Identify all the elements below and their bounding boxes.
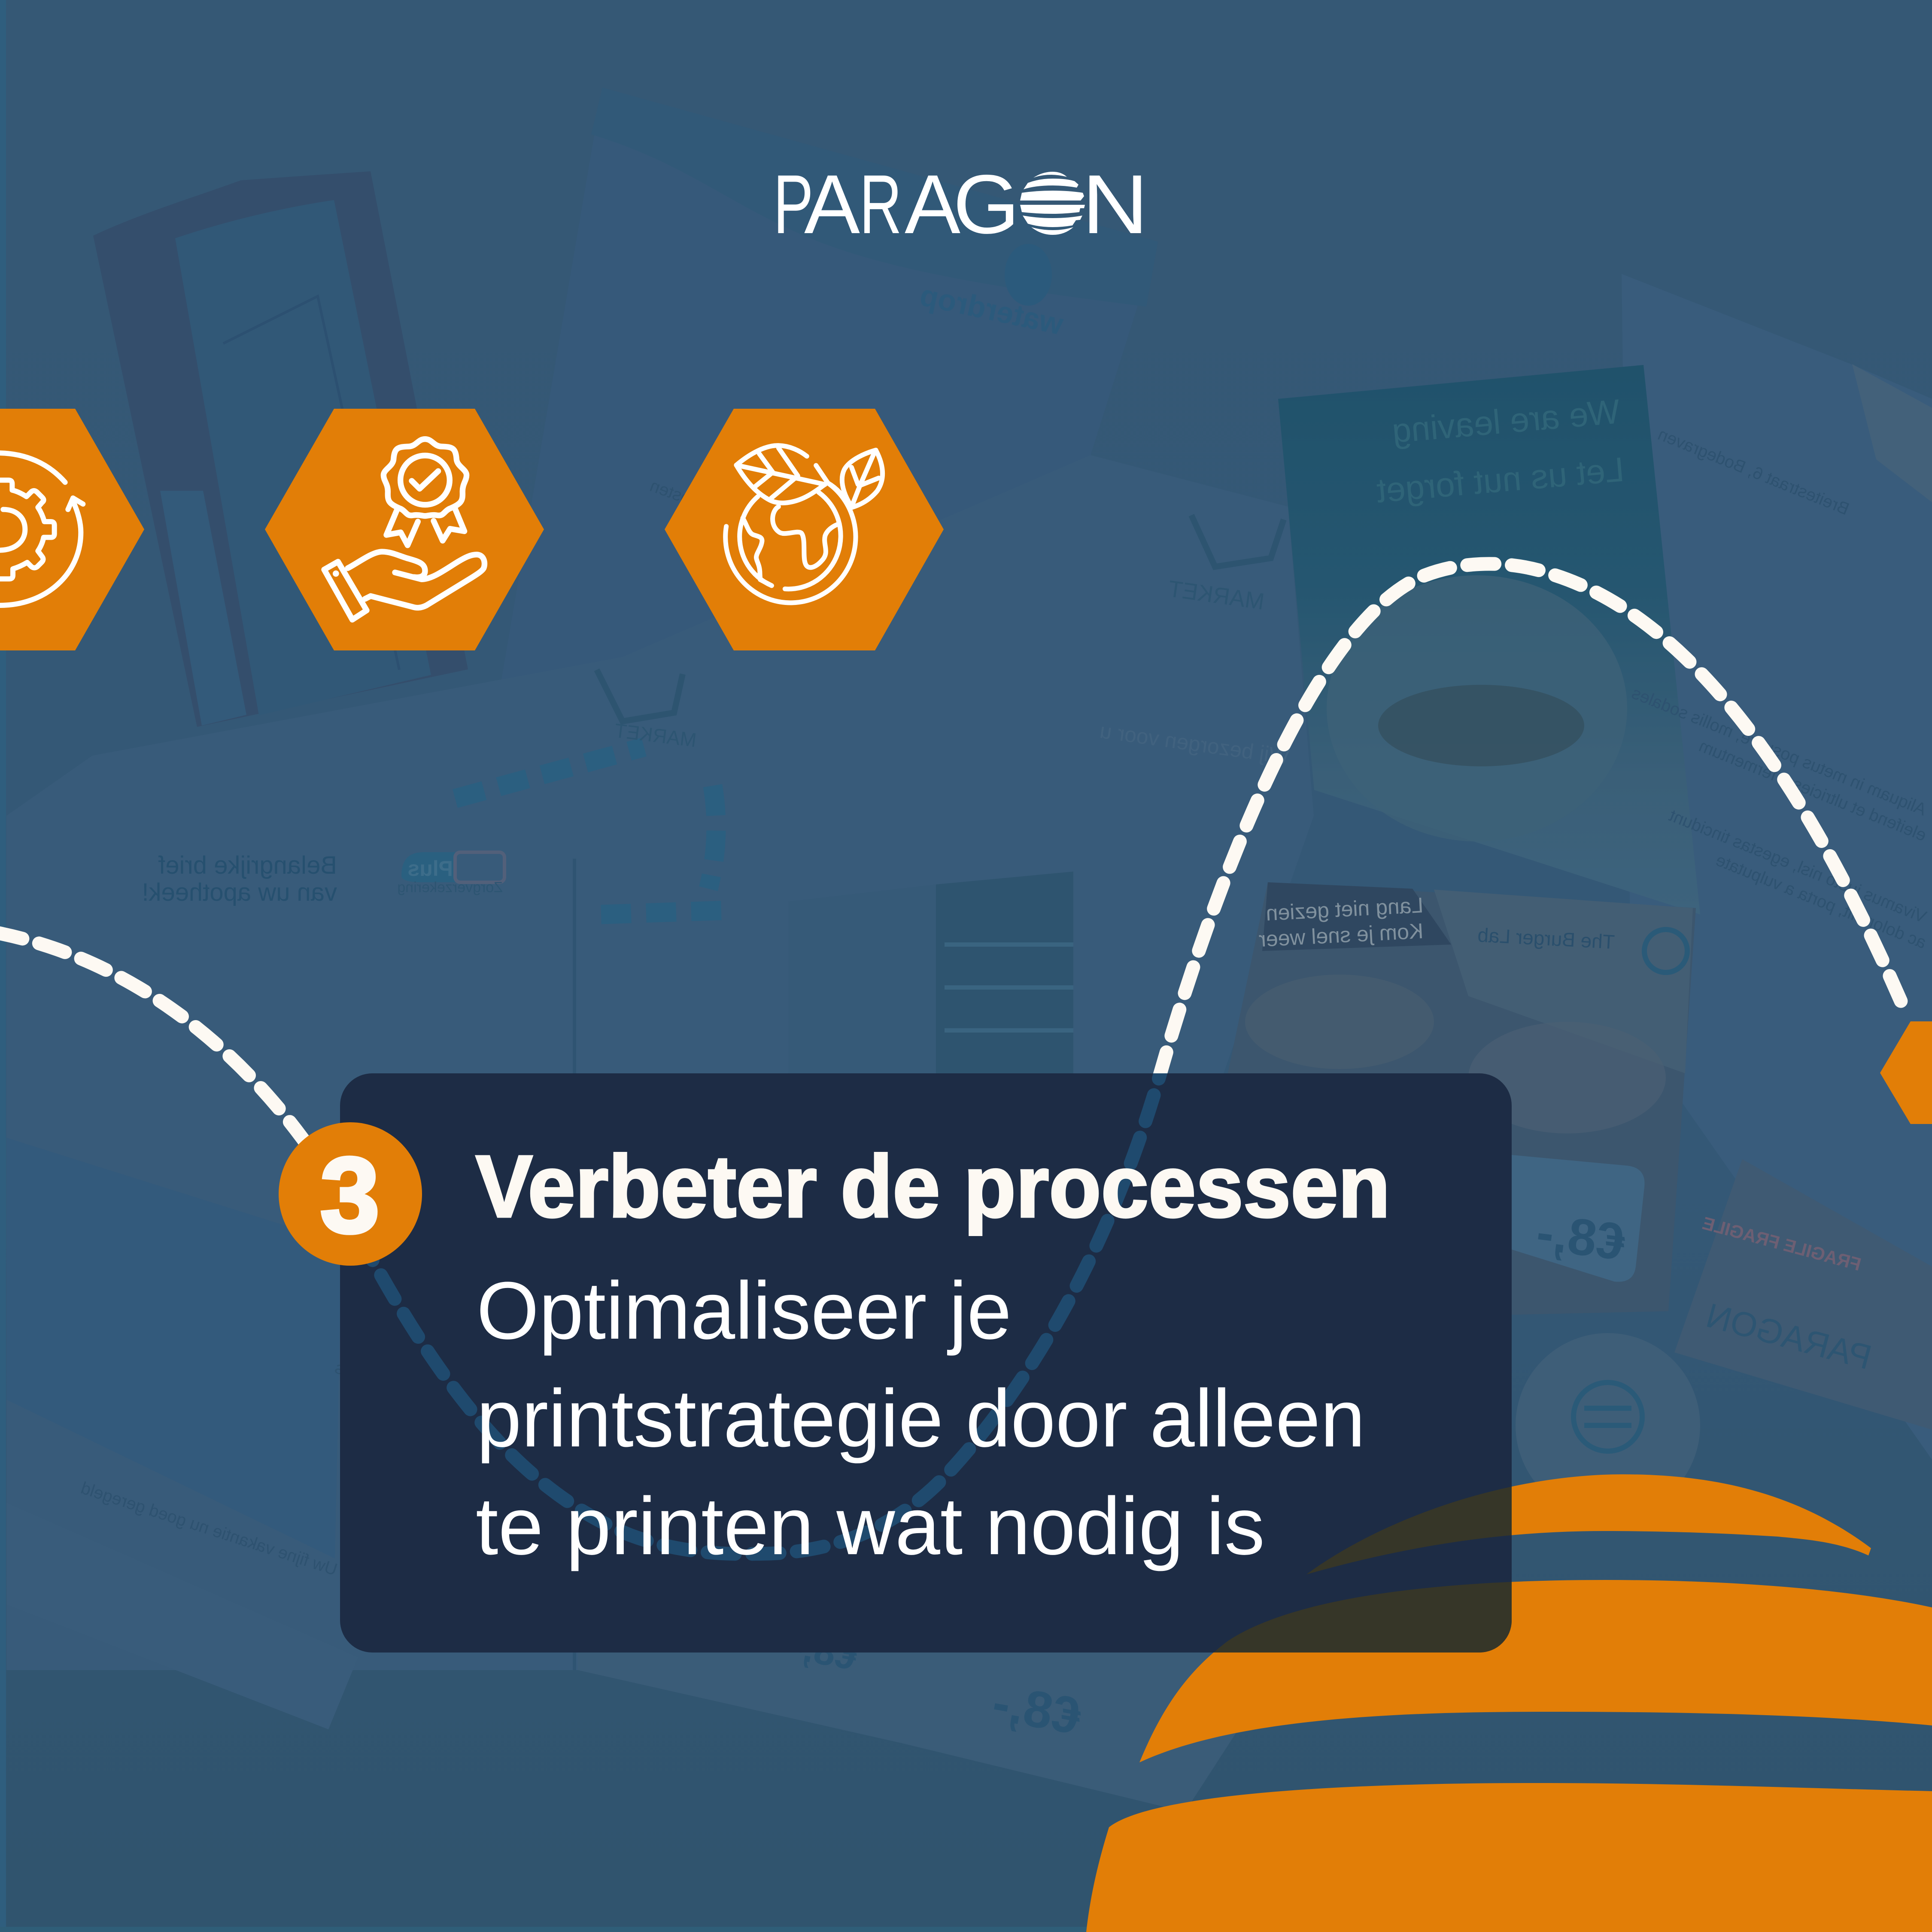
background: faded mirrored photo of printed mailings: Lang niet gezien (1265, 893, 1424, 925)
background: faded mirrored photo of printed mailings: €8,- (1534, 1203, 1628, 1271)
background: faded mirrored photo of printed mailings: Zorgverzekering (397, 879, 503, 896)
background: faded mirrored photo of printed mailings: eleifend et ultricies a fermentum (1696, 736, 1929, 845)
hexagon 3 with globe and leaves icon (665, 409, 944, 650)
background: faded mirrored photo of printed mailings: waterdrop (917, 278, 1066, 341)
background: faded mirrored photo of printed mailings: Mevrouw A.B.C. De Vries (332, 1358, 520, 1442)
background: faded mirrored photo of printed mailings: PARAGON (1702, 1296, 1876, 1376)
logo: PARAGON wordmark: A (804, 158, 860, 251)
logo: PARAGON wordmark: R (860, 158, 902, 251)
hexagon 4 partially off the right edge (1880, 1021, 1932, 1124)
background: faded mirrored photo of printed mailings: Aliquam in metus posuere, mollis sodales (1629, 683, 1929, 819)
hexagon 2 with quality badge and hand icon (265, 409, 544, 650)
step number badge (279, 1122, 422, 1266)
body text (476, 1265, 1365, 1572)
heading: Verbeter de processen (476, 1137, 1390, 1236)
background: faded mirrored photo of printed mailings: van uw apotheek! (142, 878, 337, 906)
background: faded mirrored photo of printed mailings: Let us nut forget (1375, 450, 1625, 510)
background: faded mirrored photo of printed mailings: Breitestraat 6, Bodegraven (1655, 425, 1852, 519)
logo: PARAGON wordmark (773, 158, 1148, 251)
body text: te printen wat nodig is (476, 1481, 1265, 1572)
background: faded mirrored photo of printed mailings: Plus (407, 857, 453, 881)
background: faded mirrored photo of printed mailings: Schoolstraat 99 (402, 1409, 520, 1467)
background: faded mirrored photo of printed mailings: MARKET (614, 719, 698, 751)
icon: gear with circular arrow (0, 453, 83, 605)
background: faded mirrored photo of printed mailings: Wij bezorgen voor u (1098, 719, 1291, 769)
decorative swoosh: middle orange band (1139, 1580, 1932, 1762)
background: faded mirrored photo of printed mailings: Aan en voorkom hoge kosten (647, 476, 864, 570)
background: faded mirrored photo of printed mailings: Vivamus justo nisl, egestas tincidunt (1667, 806, 1929, 927)
background: faded mirrored photo of printed mailings: The Burger Lab (1477, 923, 1615, 953)
background: faded mirrored photo of printed mailings: Belangrijke brief (158, 851, 337, 879)
background: faded mirrored photo of printed mailings: We are leaving (1391, 392, 1621, 450)
background: faded mirrored photo of printed mailings: MARKET (1166, 576, 1266, 615)
logo: PARAGON wordmark: P (773, 158, 814, 251)
icon: badge above open hand (324, 439, 485, 620)
step number badge: 3 (320, 1135, 380, 1255)
panel: text card (340, 1073, 1512, 1653)
background: faded mirrored photo of printed mailings: €8,- (988, 1674, 1086, 1746)
icon: globe with leaves (726, 446, 883, 603)
dashed route line (0, 564, 1905, 1554)
logo: PARAGON wordmark: A (905, 158, 960, 251)
background: faded mirrored photo of printed mailings: €8,- (787, 1625, 860, 1679)
logo: PARAGON wordmark: N (1082, 158, 1148, 251)
decorative swoosh: bottom orange band (1086, 1783, 1932, 1932)
body text: printstrategie door alleen (477, 1373, 1365, 1464)
hexagon 1 with gear icon (0, 409, 144, 650)
background: faded mirrored photo of printed mailings: Kom je snel weer (1258, 919, 1424, 951)
logo: PARAGON wordmark: G (953, 158, 1020, 251)
background: faded mirrored photo of printed mailings: Uw fijne vakantie nu goed geregeld (79, 1479, 340, 1580)
decorative swoosh: top orange band (1306, 1474, 1871, 1574)
background: faded mirrored photo of printed mailings: ac dolor elit, porta a vulputate (1713, 851, 1929, 952)
background: faded mirrored photo of printed mailings: FRAGILE FRAGILE (1700, 1213, 1863, 1275)
body text: Optimaliseer je (477, 1265, 1012, 1356)
